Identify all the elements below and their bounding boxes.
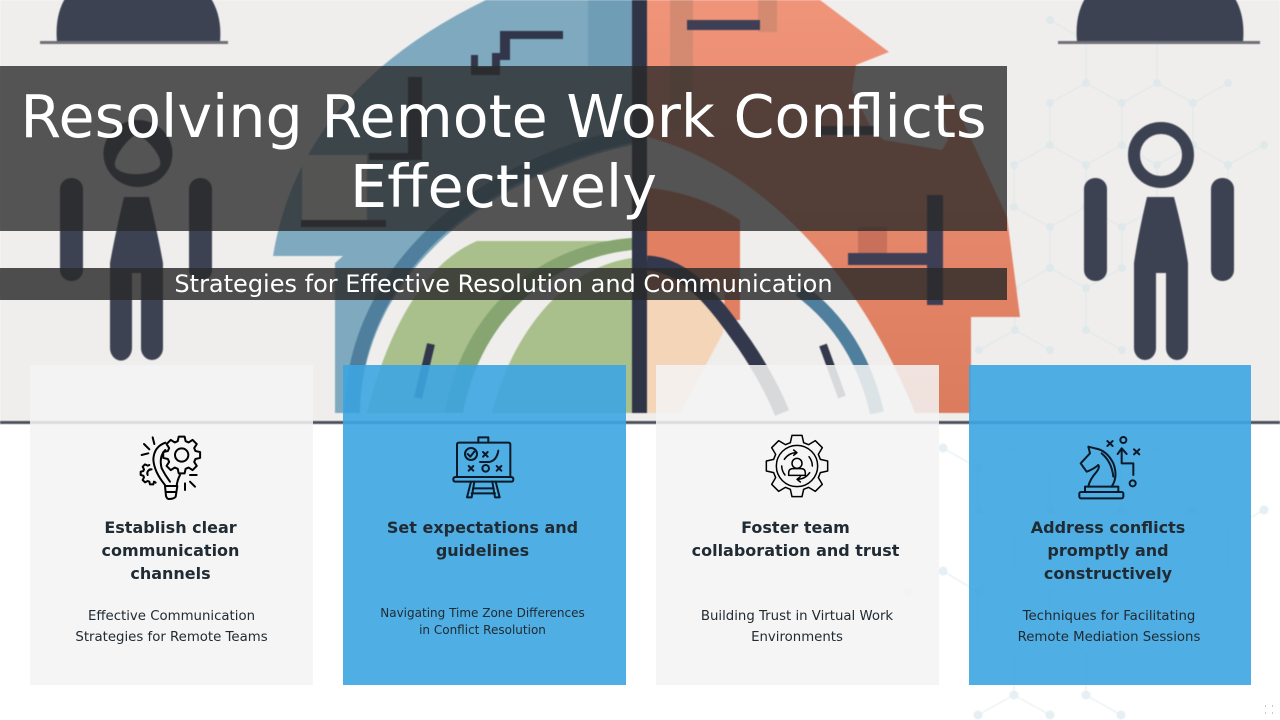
title [20,83,987,221]
heading [1030,518,1185,583]
panel: communication channels [30,365,313,685]
hexagon network upper right [975,16,1268,354]
description [380,606,585,637]
panel: team collaboration and trust [656,365,939,685]
heading: Address conflicts [1031,518,1185,537]
icon: lightbulb with gears [140,436,202,500]
heading: communication [102,541,239,560]
centre divider [632,0,647,413]
left figure [40,0,228,361]
subtitle: Strategies for Effective Resolution and Communication [174,270,833,298]
heading: Establish clear [104,518,237,537]
heading: Foster team [741,518,850,537]
description: in Conflict Resolution [419,623,546,637]
heading: constructively [1044,564,1172,583]
panel: expectations and guidelines [343,365,626,685]
description: Effective Communication [88,609,255,624]
description: Environments [751,630,843,645]
description: Strategies for Remote Teams [75,630,268,645]
title band [0,66,1007,231]
heading [387,518,578,560]
subtitle band [0,268,1007,300]
description: Techniques for Facilitating [1023,609,1195,624]
description: Building Trust in Virtual Work [701,609,893,624]
orange head [646,0,1020,413]
description: Remote Mediation Sessions [1018,630,1200,645]
heading: collaboration and trust [692,541,899,560]
description [701,609,893,645]
icon: gear with person [766,434,828,498]
heading: Set expectations and [387,518,578,537]
icon: strategy board on easel [452,436,514,498]
heading: channels [130,564,211,583]
title: Resolving Remote Work Conflicts [20,83,987,151]
heading: guidelines [436,541,529,560]
description: Navigating Time Zone Differences [380,606,585,620]
panel: address conflicts [969,365,1251,685]
corner marker dots [1265,705,1273,714]
heading [102,518,239,583]
right figure [1058,0,1260,360]
hexagon network lower right [902,444,1268,720]
title: Effectively [350,153,657,221]
description [75,609,268,645]
blue head [273,0,632,413]
heading: promptly and [1047,541,1169,560]
heading [692,518,900,560]
icon: chess knight with play arrows [1078,436,1140,500]
description [1018,609,1200,645]
